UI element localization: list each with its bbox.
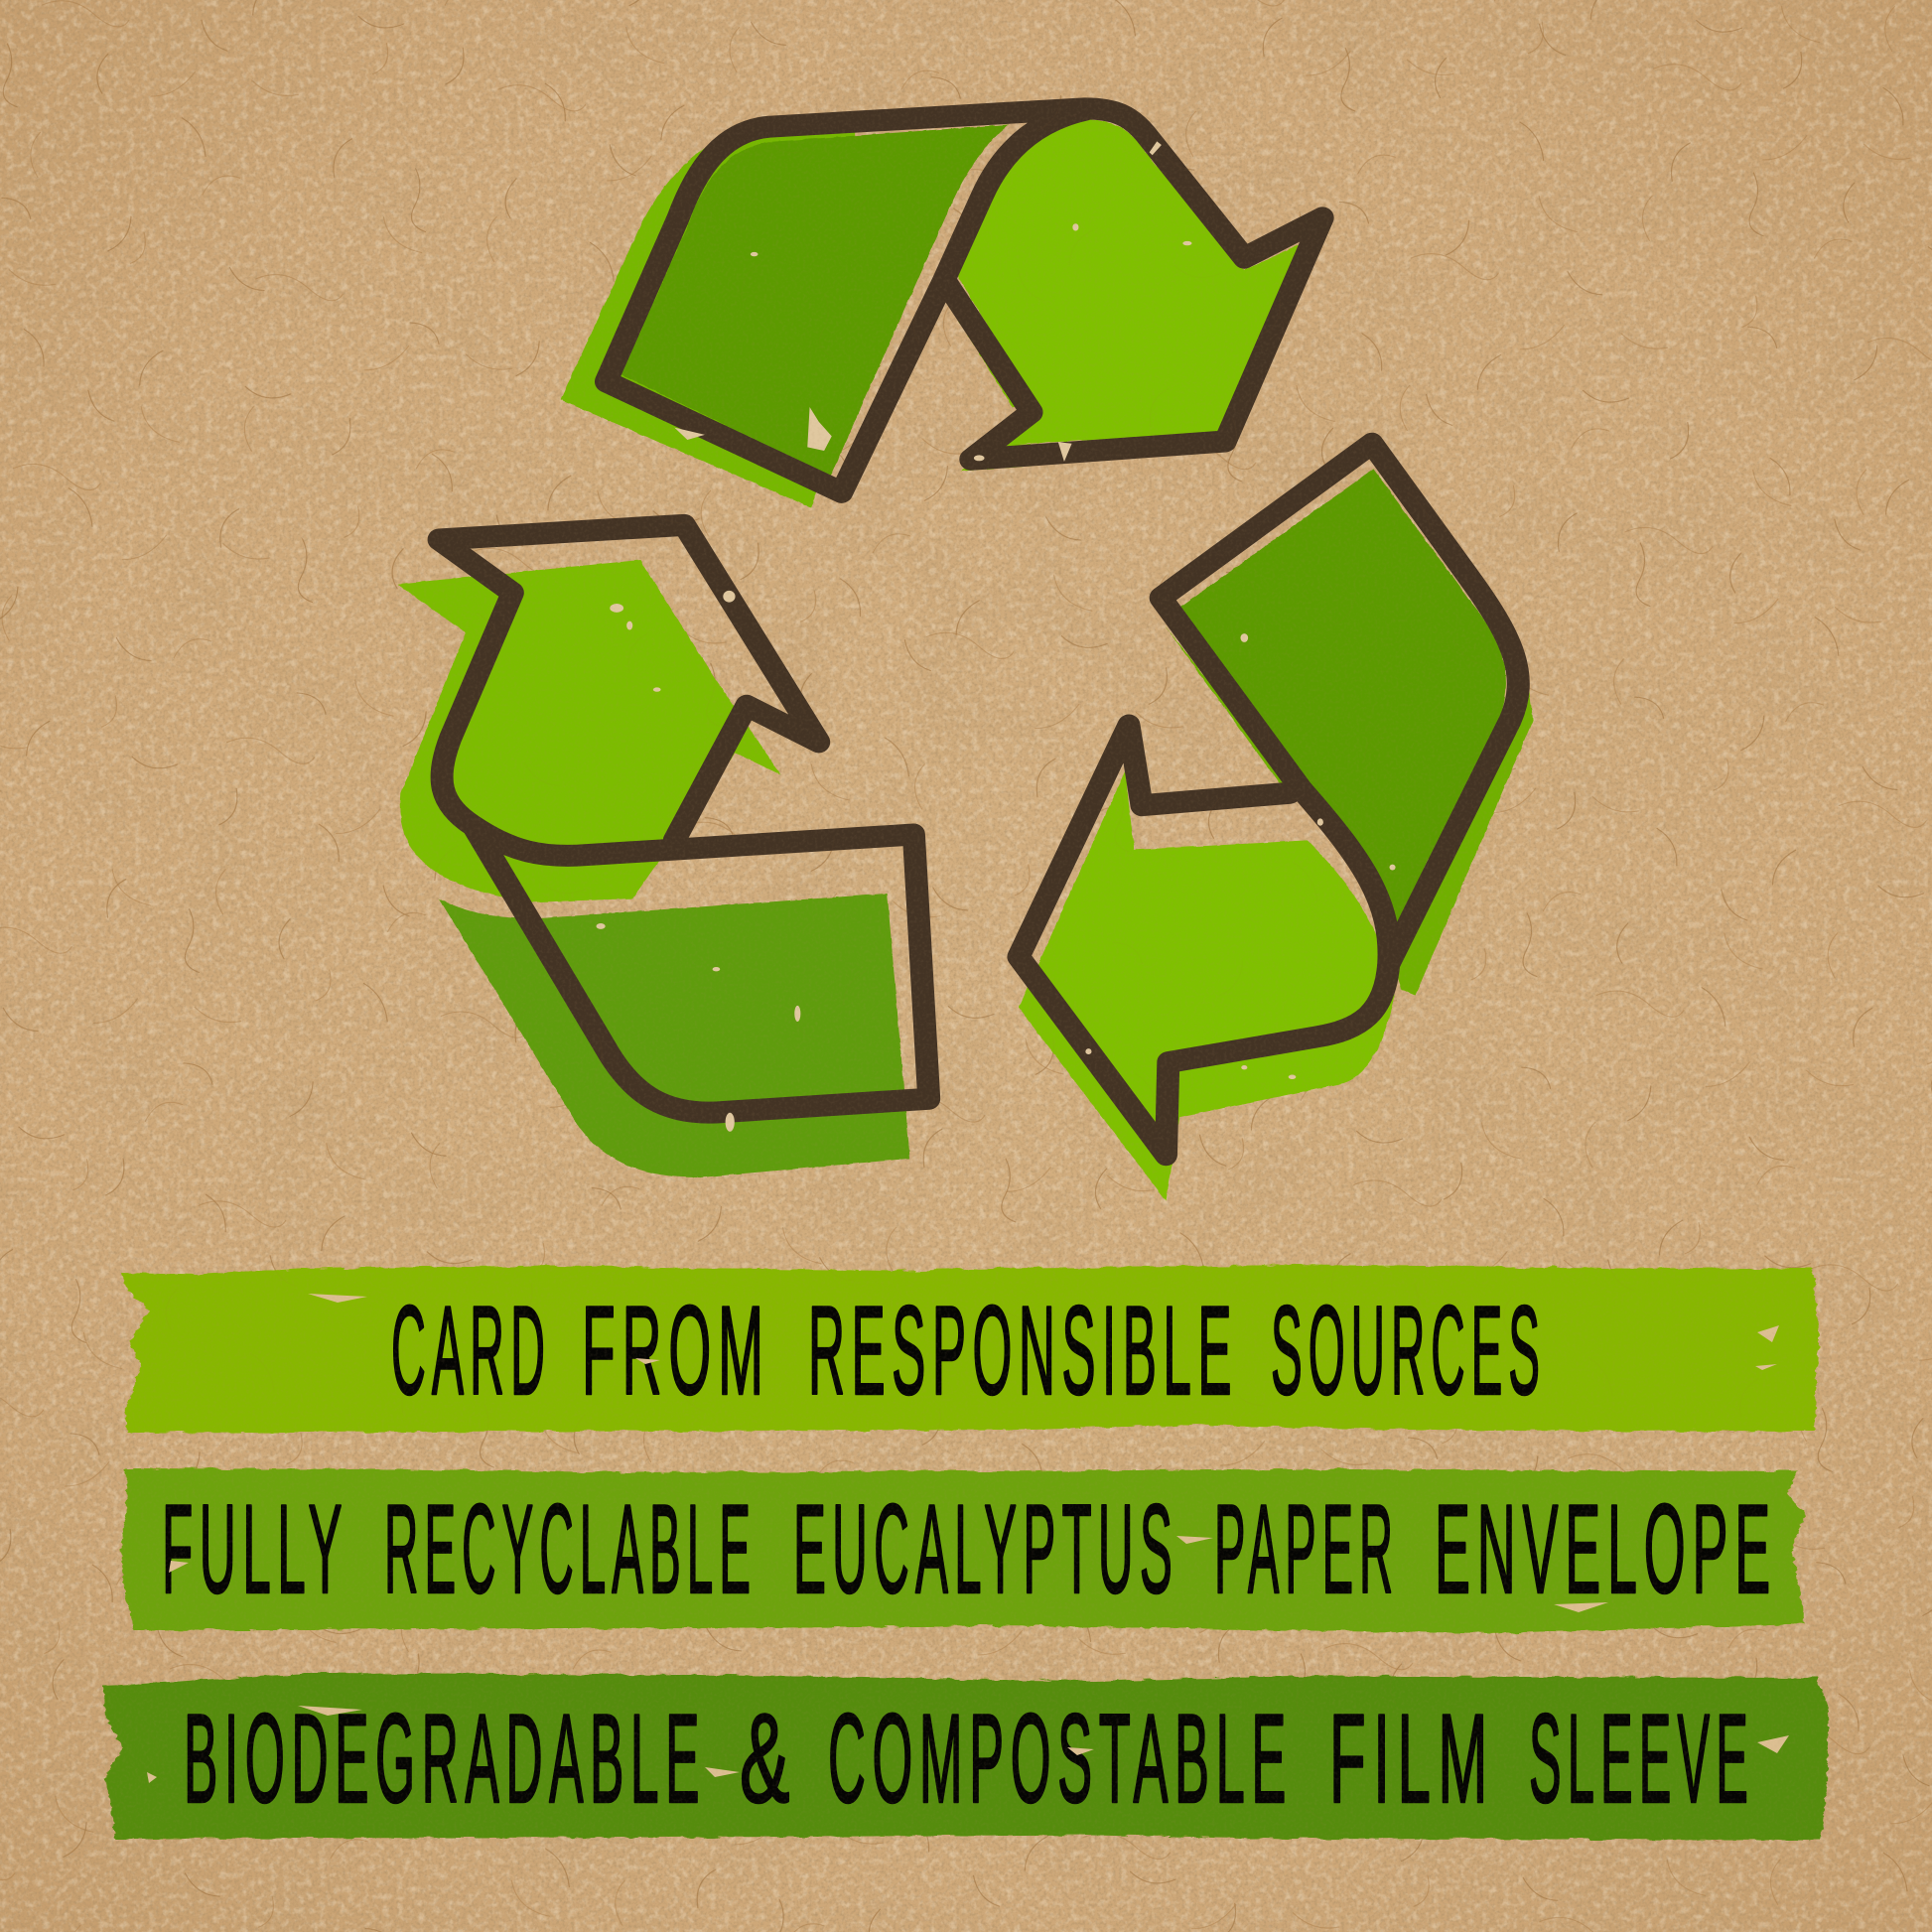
paper flecks on symbol (597, 141, 1396, 1132)
banner text: FROM (582, 1280, 770, 1421)
banner text: & (740, 1688, 799, 1829)
banner text: FULLY (162, 1478, 348, 1619)
banner: card from responsible sources (121, 1265, 1819, 1433)
banner text (162, 1478, 1777, 1619)
banner text (391, 1280, 1546, 1421)
banner text: EUCALYPTUS (793, 1478, 1178, 1619)
arrow: top (561, 108, 1322, 507)
banner text: CARD (391, 1280, 551, 1421)
banner: fully recyclable eucalyptus paper envelope (121, 1468, 1805, 1633)
arrow: bottom left (397, 525, 929, 1177)
arrow: right (1019, 444, 1533, 1200)
banner text: RESPONSIBLE (808, 1280, 1238, 1421)
recycling symbol (397, 108, 1533, 1200)
banner text: BIODEGRADABLE (184, 1688, 706, 1829)
paper flecks on banners (147, 1294, 1789, 1783)
banner text: COMPOSTABLE (828, 1688, 1293, 1829)
banner background: mid green (121, 1468, 1805, 1633)
banner text: RECYCLABLE (384, 1478, 757, 1619)
banner text: FILM (1329, 1688, 1495, 1829)
banner text: PAPER (1214, 1478, 1399, 1619)
banner background: dark green (103, 1673, 1829, 1840)
banner: biodegradable and compostable film sleeve (103, 1673, 1829, 1840)
banner background: light green (121, 1265, 1819, 1433)
